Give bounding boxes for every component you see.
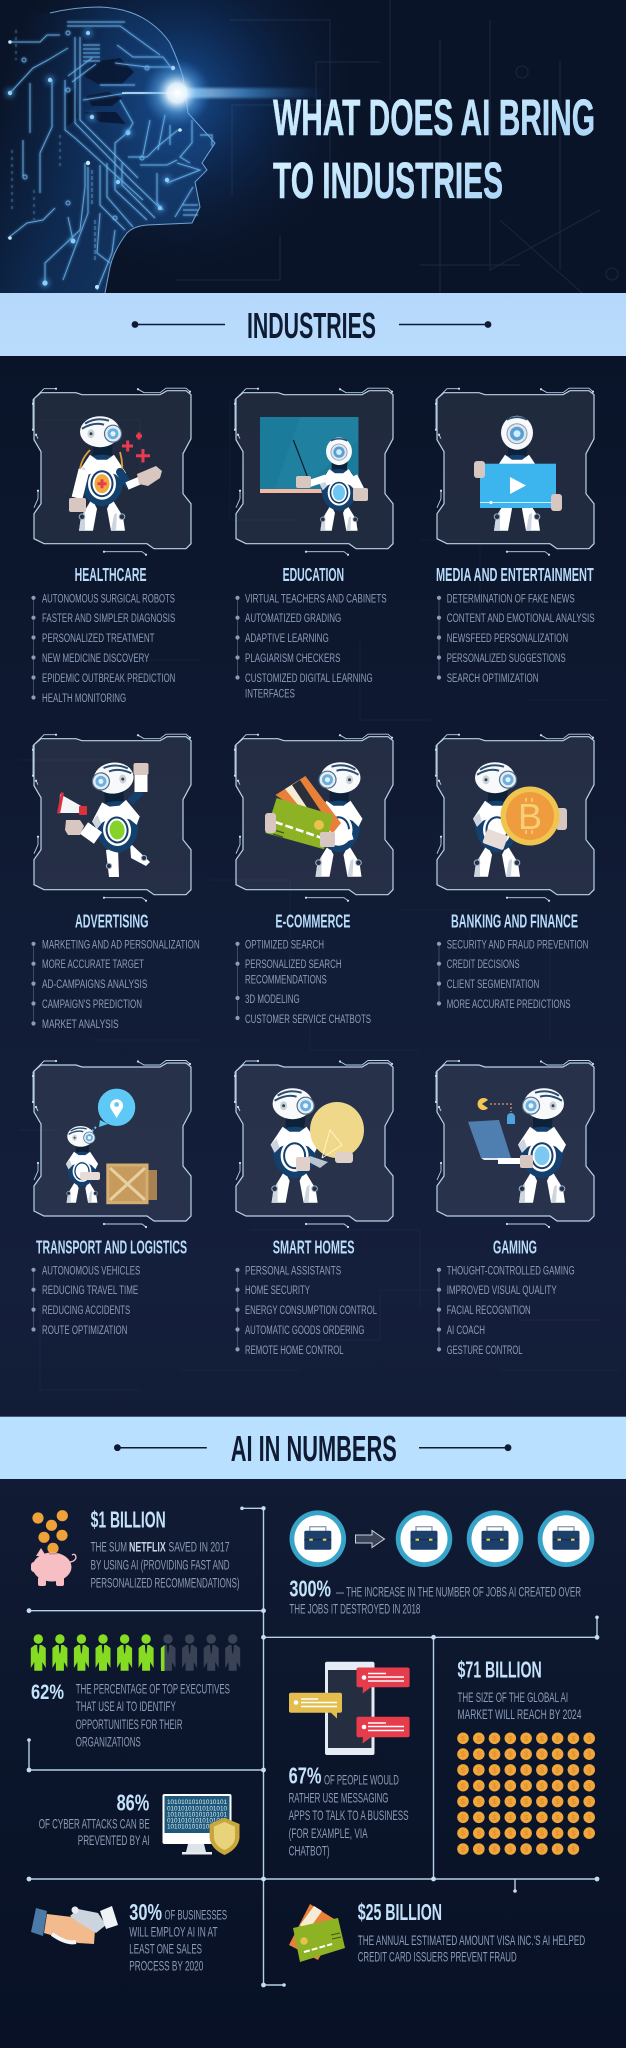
feature list: MORE ACCURATE TARGET [42,957,144,971]
value: 300% [289,1576,331,1602]
feature list: HEALTH MONITORING [42,691,126,705]
description: NETFLIX [129,1540,166,1555]
description [129,1899,227,1974]
feature list: OPTIMIZED SEARCH [245,937,324,951]
feature list: AI COACH [447,1323,485,1337]
feature list: 3D MODELING [245,992,300,1006]
description: (FOR EXAMPLE, VIA [289,1826,368,1841]
description: OPPORTUNITIES FOR THEIR [76,1717,182,1732]
feature list: INTERFACES [245,686,295,700]
description: CHATBOT) [289,1844,330,1859]
feature list: PERSONALIZED TREATMENT [42,631,155,645]
people pictogram [31,1634,240,1671]
value: $25 BILLION [358,1899,442,1925]
stat: $1 billion [31,1506,240,1591]
feature list: AD-CAMPAIGNS ANALYSIS [42,977,147,991]
robot holding bitcoin [473,762,567,877]
icon: piggy bank with coins [31,1510,76,1586]
feature list: CUSTOMIZED DIGITAL LEARNING [245,671,373,685]
robot teacher with blackboard [260,417,368,531]
title [273,89,595,209]
description [289,1762,409,1859]
feature list [437,937,588,1011]
feature list [437,591,595,685]
description: CREDIT CARD ISSUERS PREVENT FRAUD [358,1950,517,1965]
icon: handshake [31,1906,118,1944]
panel: gaming [435,1060,594,1357]
feature list: CLIENT SEGMENTATION [447,977,539,991]
robot holding light bulb [271,1088,364,1203]
stat: $71 billion [457,1657,595,1855]
feature list: RECOMMENDATIONS [245,972,327,986]
panel: e-commerce [234,734,393,1026]
icon: monitor with shield: 10101010101010101 [167,1799,227,1806]
description: PREVENTED BY AI [78,1833,150,1848]
description: ORGANIZATIONS [76,1735,141,1750]
feature list: AUTONOMOUS VEHICLES [42,1263,140,1277]
description: THE PERCENTAGE OF TOP EXECUTIVES [76,1681,230,1696]
description: 30% [129,1899,162,1925]
icon: monitor with shield: 01010101010101010 [167,1817,227,1824]
panel: banking and finance [435,734,594,1011]
description [458,1690,582,1722]
description [358,1933,585,1965]
robot holding credit cards [265,762,362,877]
feature list [235,1263,377,1357]
stat: 300% jobs [289,1510,594,1616]
heading: GAMING [493,1237,537,1257]
feature list: CAMPAIGN'S PREDICTION [42,997,142,1011]
description: OF CYBER ATTACKS CAN BE [39,1816,150,1831]
description: OF BUSINESSES [164,1907,227,1922]
value: $71 BILLION [458,1657,542,1683]
stat: 62% executives [31,1634,240,1750]
panel: advertising [31,734,200,1031]
description: BY USING AI (PROVIDING FAST AND [91,1558,230,1573]
robot holding bitcoin: B [518,796,542,837]
feature list [31,591,175,705]
feature list: ROUTE OPTIMIZATION [42,1323,127,1337]
feature list: REMOTE HOME CONTROL [245,1343,344,1357]
description: OF PEOPLE WOULD [324,1772,399,1787]
description: RATHER USE MESSAGING [289,1790,388,1805]
icon: briefcase row with arrow [290,1510,594,1567]
feature list: PERSONALIZED SEARCH [245,957,342,971]
description: THE JOBS IT DESTROYED IN 2018 [289,1601,421,1616]
description [76,1681,230,1750]
feature list: SEARCH OPTIMIZATION [447,671,538,685]
description: 67% [289,1762,321,1788]
connector lines grid [27,1506,599,1987]
description: SAVED IN 2017 [168,1540,230,1555]
feature list [235,591,387,700]
section band: AI in numbers: AI IN NUMBERS [231,1428,397,1469]
feature list [31,1263,140,1337]
heading: EDUCATION [283,565,344,585]
icon: credit cards [289,1904,345,1962]
panel: transport and logistics [31,1060,191,1337]
feature list: EPIDEMIC OUTBREAK PREDICTION [42,671,175,685]
feature list: PLAGIARISM CHECKERS [245,651,340,665]
stat: $25 billion [289,1899,585,1965]
description: THAT USE AI TO IDENTIFY [76,1699,176,1714]
heading: HEALTHCARE [75,565,146,585]
stat: 30% sales [31,1899,227,1974]
section band: industries [0,293,626,356]
feature list [31,937,200,1031]
panel: smart homes [234,1060,393,1357]
feature list: REDUCING ACCIDENTS [42,1303,130,1317]
panel: media and entertainment [435,388,595,685]
description: PROCESS BY 2020 [129,1959,204,1974]
feature list [437,1263,575,1357]
panel: education [234,388,393,700]
description: PERSONALIZED RECOMMENDATIONS) [91,1576,240,1591]
robot doctor illustration [69,416,162,531]
feature list: CREDIT DECISIONS [447,957,520,971]
feature list: PERSONAL ASSISTANTS [245,1263,341,1277]
heading: E-COMMERCE [275,911,350,931]
feature list [235,937,371,1026]
stat: 67% messaging [289,1662,410,1859]
background circuit pattern [20,400,620,1390]
robot with megaphone [57,760,150,877]
icon: phone with chat bubbles [289,1662,410,1755]
description [289,1585,581,1616]
feature list: AUTOMATIZED GRADING [245,611,341,625]
heading: TRANSPORT AND LOGISTICS [36,1237,187,1257]
feature list: MARKETING AND AD PERSONALIZATION [42,937,200,951]
stat: 86% cyber attacks [39,1790,240,1855]
icon: monitor with shield [162,1794,240,1855]
feature list: NEW MEDICINE DISCOVERY [42,651,149,665]
value: 86% [117,1790,149,1816]
feature list: FACIAL RECOGNITION [447,1303,531,1317]
feature list: IMPROVED VISUAL QUALITY [447,1283,557,1297]
robot holding video screen [474,416,562,531]
feature list: HOME SECURITY [245,1283,310,1297]
description [91,1540,240,1591]
description: LEAST ONE SALES [129,1942,202,1957]
robot with crate and location bubble [66,1089,157,1203]
heading: SMART HOMES [273,1237,355,1257]
robot with laptop and pac-man [468,1088,566,1203]
feature list: GESTURE CONTROL [447,1343,523,1357]
icon: monitor with shield: 01010101010101010 [167,1805,227,1812]
feature list: ADAPTIVE LEARNING [245,631,329,645]
section band: AI in numbers [0,1417,626,1479]
feature list: REDUCING TRAVEL TIME [42,1283,138,1297]
section band: industries: INDUSTRIES [247,305,376,346]
description: APPS TO TALK TO A BUSINESS [289,1808,409,1823]
feature list: VIRTUAL TEACHERS AND CABINETS [245,591,387,605]
feature list: MARKET ANALYSIS [42,1017,119,1031]
panel: healthcare [31,388,191,705]
coin grid pictogram [457,1732,595,1855]
feature list: FASTER AND SIMPLER DIAGNOSIS [42,611,175,625]
feature list: AUTOMATIC GOODS ORDERING [245,1323,364,1337]
icon: monitor with shield: 10101010101010101 [167,1811,227,1818]
value: 62% [31,1680,64,1704]
heading: ADVERTISING [75,911,148,931]
description [39,1816,150,1848]
header: AI head illustration [0,0,626,300]
feature list: ENERGY CONSUMPTION CONTROL [245,1303,377,1317]
value: $1 BILLION [91,1506,166,1532]
icon: monitor with shield: 10101010101010101 [167,1823,227,1830]
feature list: AUTONOMOUS SURGICAL ROBOTS [42,591,175,605]
description: WILL EMPLOY AI IN AT [129,1925,218,1940]
description: THE SUM [91,1540,127,1555]
feature list: CUSTOMER SERVICE CHATBOTS [245,1012,371,1026]
